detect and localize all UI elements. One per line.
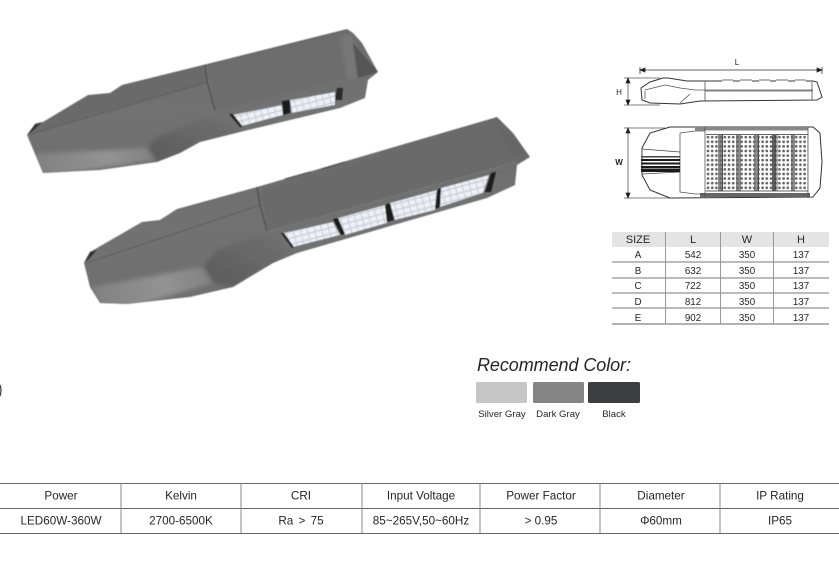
spec headers: Power: [44, 490, 78, 502]
top view dimension drawing: [615, 127, 822, 198]
swatch: silver gray: [476, 382, 527, 420]
table rows: E: [635, 313, 642, 324]
table rows: C: [634, 281, 642, 292]
spec headers: Power Factor: [506, 490, 576, 502]
table rows: 350: [739, 281, 756, 292]
table rows: 350: [739, 250, 756, 261]
table rows: [634, 250, 809, 324]
table header: L: [690, 234, 696, 246]
height dimension: H: [616, 88, 622, 97]
table rows: 137: [793, 313, 809, 324]
LED array: [706, 134, 808, 191]
spec headers: CRI: [291, 490, 311, 502]
spec headers: Kelvin: [165, 490, 197, 502]
spec values: IP65: [768, 514, 793, 528]
spec headers: IP Rating: [756, 490, 804, 502]
product photo: lower street light: [84, 117, 530, 308]
table rows: 350: [739, 297, 756, 308]
table rows: 137: [793, 250, 809, 261]
spec values: [21, 514, 793, 528]
top outline: [641, 127, 822, 198]
spec headers: Diameter: [637, 490, 685, 502]
table rows: 812: [685, 297, 701, 308]
height dimension: [616, 78, 660, 105]
lamp body: [27, 29, 378, 176]
table header: W: [742, 234, 753, 246]
swatch: dark gray: Dark Gray: [536, 409, 580, 420]
table rows: B: [635, 266, 642, 277]
width dimension: W: [615, 158, 623, 167]
spec values: Ra > 75: [278, 514, 324, 528]
size table: [612, 232, 829, 324]
recommended colours: [476, 355, 640, 420]
spec values: 2700-6500K: [149, 514, 213, 528]
spec headers: [44, 490, 804, 502]
table rows: 902: [685, 313, 701, 324]
spec values: 85~265V,50~60Hz: [373, 514, 469, 528]
swatch: dark gray: [533, 382, 584, 420]
table rows: 137: [793, 297, 809, 308]
LED panels: [229, 88, 343, 127]
side profile outline: [641, 78, 822, 104]
table rows: 350: [739, 266, 756, 277]
table header: SIZE: [626, 234, 650, 246]
spec headers: Input Voltage: [387, 490, 455, 502]
table rows: 137: [793, 281, 809, 292]
lamp body: [84, 117, 530, 308]
swatch: black: Black: [602, 409, 626, 420]
product photo: upper street light: [27, 29, 378, 176]
width dimension: [615, 128, 670, 198]
length dimension: [640, 58, 822, 74]
edge mark: [0, 385, 1, 396]
table rows: 632: [685, 266, 701, 277]
heading: Recommend Color:: [477, 355, 631, 375]
specification table: [0, 483, 839, 534]
spec values: Φ60mm: [640, 514, 682, 528]
spec values: > 0.95: [525, 514, 558, 528]
table header: H: [797, 234, 805, 246]
table rows: 350: [739, 313, 756, 324]
table rows: 137: [793, 266, 809, 277]
table header: [626, 234, 805, 246]
table rows: A: [635, 250, 642, 261]
swatch: silver gray: Silver Gray: [478, 409, 526, 420]
heat-sink fins: [641, 156, 680, 172]
table rows: 542: [685, 250, 701, 261]
length dimension: L: [735, 58, 740, 67]
table rows: 722: [685, 281, 701, 292]
spec values: LED60W-360W: [21, 514, 101, 528]
swatch: black: [588, 382, 640, 420]
side view dimension drawing: [616, 58, 822, 105]
LED panels: [281, 172, 496, 248]
table rows: D: [634, 297, 642, 308]
